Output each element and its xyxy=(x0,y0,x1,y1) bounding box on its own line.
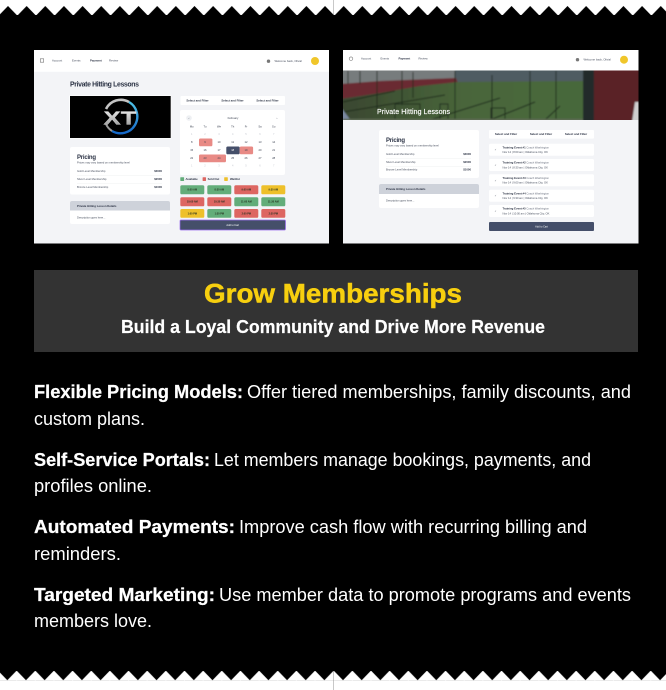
calendar: 6 xyxy=(259,132,261,136)
filter dropdowns: Select and Filter xyxy=(495,132,518,136)
navigation bar xyxy=(34,50,329,72)
benefit: targeted marketing xyxy=(34,585,631,631)
calendar: 23 xyxy=(204,156,207,160)
time slots: 1:00 PM xyxy=(188,212,197,215)
benefit: self-service portals xyxy=(34,450,591,496)
calendar: 1 xyxy=(191,132,193,136)
pricing card: Gold Level Membership xyxy=(386,152,415,156)
screenshot: booking calendar page xyxy=(34,50,329,244)
calendar: 9 xyxy=(204,140,206,144)
benefit: automated payments: Improve cash flow with recurring billing and xyxy=(239,517,587,537)
calendar: 3 xyxy=(218,132,220,136)
availability legend: Waitlist xyxy=(230,177,240,181)
time slots: 10:00 AM xyxy=(187,201,198,204)
calendar: 12 xyxy=(244,140,248,144)
calendar: 4 xyxy=(232,164,234,168)
benefit: flexible pricing models: Flexible Pricing Models: xyxy=(34,382,243,402)
navigation bar: Account xyxy=(361,57,371,61)
filter dropdowns: Select and Filter xyxy=(221,99,245,103)
availability legend: Sold Out xyxy=(208,177,219,181)
lesson details card xyxy=(70,201,170,224)
lesson details card xyxy=(379,184,479,208)
training event list: Training Event #5 Coach Washington xyxy=(502,207,550,211)
time slots: 8:00 AM xyxy=(188,189,197,192)
training event list xyxy=(489,144,594,217)
training event list: ✓ xyxy=(494,179,497,182)
add to cart button xyxy=(489,222,594,231)
training event list: ✓ xyxy=(494,210,497,213)
training event list: Training Event #1 Coach Washington xyxy=(502,145,550,149)
benefit: automated payments xyxy=(34,517,587,564)
pricing card: $3000 xyxy=(154,169,162,173)
benefit: self-service portals: Let members manage bookings, payments, and xyxy=(214,450,591,470)
calendar: 8 xyxy=(191,140,193,144)
benefit: targeted marketing: Targeted Marketing: xyxy=(34,585,215,605)
time slots xyxy=(180,185,285,218)
pricing card: $3000 xyxy=(463,152,471,156)
training event list: Nov 14 | 8:30 am | Oklahoma City, OK xyxy=(502,165,548,169)
pricing card: $1000 xyxy=(154,185,162,189)
navigation bar: Events xyxy=(72,58,81,62)
XT logo banner xyxy=(69,96,171,138)
navigation bar xyxy=(343,50,638,70)
lesson details card: Description goes here... xyxy=(386,198,415,202)
calendar: 2 xyxy=(204,132,206,136)
benefit: automated payments: reminders. xyxy=(34,544,121,564)
calendar: 13 xyxy=(258,140,262,144)
lesson details card: Description goes here... xyxy=(77,215,106,219)
lesson details card: Private Hitting Lesson Details xyxy=(386,187,426,191)
training event list: ✓ xyxy=(494,164,497,167)
pricing card: $2000 xyxy=(154,177,162,181)
filter dropdowns: Select and Filter xyxy=(186,99,210,103)
benefit: targeted marketing: Use member data to promote programs and events xyxy=(219,585,631,605)
filter dropdowns xyxy=(180,96,285,105)
calendar: 24 xyxy=(218,156,221,160)
calendar: 1 xyxy=(191,164,193,168)
time slots: 9:00 AM xyxy=(242,189,251,192)
time slots: 11:30 AM xyxy=(268,201,279,204)
calendar: 19 xyxy=(244,148,248,152)
calendar: 4 xyxy=(232,132,234,136)
calendar: 5 xyxy=(245,132,247,136)
pricing card: $2000 xyxy=(463,160,471,164)
calendar: Tu xyxy=(203,124,207,128)
calendar: Mo xyxy=(190,124,194,128)
training event list: ✓ xyxy=(494,195,497,198)
pricing card: Prices may vary based on membership level xyxy=(386,144,439,148)
calendar: 21 xyxy=(272,148,276,152)
pricing card: Silver Level Membership xyxy=(77,177,107,181)
hero title: Private Hitting Lessons xyxy=(377,109,450,116)
time slots: 2:30 PM xyxy=(269,212,278,215)
pricing card: $1000 xyxy=(463,167,471,171)
calendar: 15 xyxy=(190,148,194,152)
calendar: 5 xyxy=(245,164,247,168)
filter dropdowns xyxy=(489,130,594,139)
subtitle: Build a Loyal Community and Drive More Revenue xyxy=(121,316,545,337)
calendar: 28 xyxy=(272,156,276,160)
navigation bar: Welcome back, Olivia! xyxy=(584,58,611,62)
calendar: Sa xyxy=(258,124,262,128)
calendar: 18 xyxy=(231,148,235,152)
time slots: 1:30 PM xyxy=(215,212,224,215)
filter dropdowns: Select and Filter xyxy=(530,132,553,136)
pricing card xyxy=(379,130,479,178)
benefit: self-service portals: profiles online. xyxy=(34,476,152,496)
calendar: 20 xyxy=(258,148,262,152)
calendar: ‹ xyxy=(189,116,190,120)
navigation bar: Welcome back, Olivia! xyxy=(274,59,302,63)
add to cart button: Add to Cart xyxy=(226,224,239,227)
navigation bar: Review xyxy=(418,57,429,61)
time slots: 11:00 AM xyxy=(241,201,252,204)
training event list: Training Event #4 Coach Washington xyxy=(502,191,550,195)
benefit: flexible pricing models: Offer tiered memberships, family discounts, and xyxy=(247,382,631,402)
calendar: 16 xyxy=(204,148,207,152)
benefit: self-service portals: Self-Service Portals: xyxy=(34,450,210,470)
training event list: Training Event #2 Coach Washington xyxy=(502,161,550,165)
training event list: Training Event #3 Coach Washington xyxy=(502,176,550,180)
calendar: Fr xyxy=(245,124,247,128)
benefit: targeted marketing: members love. xyxy=(34,611,152,631)
training event list: Nov 14 | 9:00 am | Oklahoma City, OK xyxy=(502,181,548,185)
navigation bar: Payment xyxy=(90,58,102,62)
pricing card xyxy=(70,147,170,194)
calendar: 2 xyxy=(204,164,206,168)
calendar: 27 xyxy=(258,156,262,160)
pricing card: Bronze Level Membership xyxy=(386,167,418,171)
calendar: We xyxy=(217,124,221,128)
calendar: 10 xyxy=(218,140,221,144)
calendar: 7 xyxy=(273,164,275,168)
calendar: 25 xyxy=(231,156,235,160)
calendar: 26 xyxy=(244,156,248,160)
calendar: 14 xyxy=(272,140,276,144)
calendar: 11 xyxy=(231,140,235,144)
pricing card: Pricing xyxy=(77,155,96,161)
calendar xyxy=(180,110,285,175)
availability legend xyxy=(180,177,240,181)
navigation bar: Payment xyxy=(398,57,410,61)
pricing card: Silver Level Membership xyxy=(386,160,416,164)
training event list: Nov 14 | 8:00 am | Oklahoma City, OK xyxy=(502,150,548,154)
benefit: flexible pricing models xyxy=(34,382,631,429)
hero photo of batting cages xyxy=(340,68,640,122)
screenshot: training events page xyxy=(340,50,640,244)
time slots: 9:30 AM xyxy=(269,189,278,192)
lesson details card: Private Hitting Lesson Details xyxy=(77,204,117,208)
calendar: Su xyxy=(272,124,276,128)
pricing card: Gold Level Membership xyxy=(77,169,106,173)
navigation bar: Account xyxy=(52,58,62,62)
navigation bar: Review xyxy=(109,58,119,62)
calendar: Th xyxy=(231,124,235,128)
pricing card: Pricing xyxy=(386,138,405,144)
calendar: 17 xyxy=(218,148,221,152)
benefit: flexible pricing models: custom plans. xyxy=(34,409,145,429)
benefit: automated payments: Automated Payments: xyxy=(34,517,235,537)
calendar: February xyxy=(228,116,239,120)
pricing card: Bronze Level Membership xyxy=(77,185,109,189)
filter dropdowns: Select and Filter xyxy=(565,132,588,136)
calendar: 22 xyxy=(190,156,194,160)
filter dropdowns: Select and Filter xyxy=(256,99,280,103)
add to cart button xyxy=(180,220,286,230)
time slots: 2:00 PM xyxy=(242,212,251,215)
calendar: 3 xyxy=(218,164,220,168)
navigation bar: Events xyxy=(380,57,390,61)
XT logo banner: XT xyxy=(104,108,136,128)
heading banner xyxy=(34,270,638,352)
calendar: › xyxy=(277,116,278,120)
training event list: Nov 14 | 9:30 am | Oklahoma City, OK xyxy=(502,196,548,200)
time slots: 10:30 AM xyxy=(214,201,225,204)
calendar: 6 xyxy=(259,164,261,168)
page title: Private Hitting Lessons xyxy=(70,81,139,88)
availability legend: Available xyxy=(186,177,198,181)
add to cart button: Add to Cart xyxy=(535,225,548,228)
training event list: Nov 14 | 10:00 am | Oklahoma City, OK xyxy=(502,211,550,215)
pricing card: Prices may vary based on membership level xyxy=(77,160,130,164)
training event list: ✓ xyxy=(494,149,497,152)
title: Grow Memberships xyxy=(204,279,462,309)
time slots: 8:30 AM xyxy=(215,189,224,192)
calendar: 7 xyxy=(273,132,275,136)
